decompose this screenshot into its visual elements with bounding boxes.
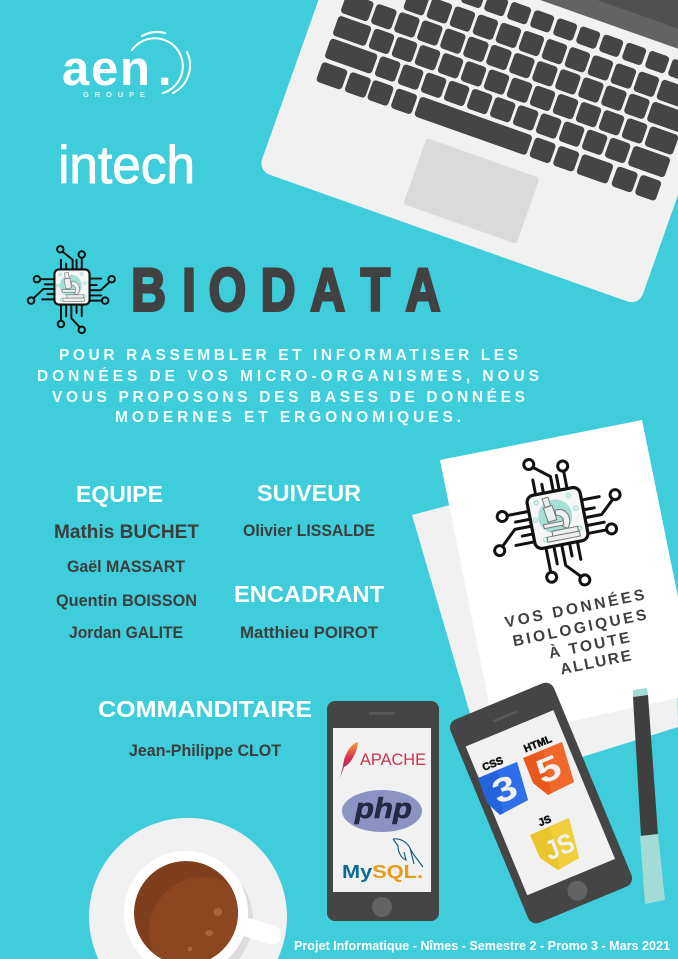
- intro text block: DONNÉES DE VOS MICRO-ORGANISMES, NOUS: [37, 368, 539, 385]
- panel: team: Mathis BUCHET: [54, 522, 199, 543]
- footer: Projet Informatique - Nîmes - Semestre 2 - Promo 3 - Mars 2021: [294, 939, 670, 953]
- icon: large chip: [479, 444, 636, 601]
- panel: team: [54, 481, 199, 642]
- panel: team: Gaël MASSART: [67, 558, 185, 576]
- logo: css3: CSS: [481, 755, 505, 774]
- intro text block: [37, 347, 539, 426]
- logo: mysql: [342, 839, 423, 882]
- logo: aen groupe: aen.: [62, 42, 172, 96]
- logo: css3: 3: [487, 768, 523, 812]
- panel: encadrant: [234, 581, 384, 642]
- heading: equipe: EQUIPE: [76, 481, 163, 507]
- paper slogan: ALLURE: [559, 647, 633, 678]
- logo: html5: HTML: [522, 733, 554, 755]
- icon: coffee cup: [89, 818, 287, 959]
- paper slogan: BIOLOGIQUES: [511, 607, 648, 650]
- panel: commanditaire: COMMANDITAIRE: [98, 696, 312, 722]
- panel: encadrant: ENCADRANT: [234, 581, 384, 607]
- logo: apache: APACHE: [360, 750, 426, 769]
- panel: team: Quentin BOISSON: [56, 592, 197, 610]
- panel: encadrant: Matthieu POIROT: [240, 624, 378, 642]
- front paper: [440, 420, 678, 738]
- logo: aen groupe: [62, 32, 190, 99]
- panel: suiveur: Olivier LISSALDE: [243, 521, 375, 540]
- intro text block: VOUS PROPOSONS DES BASES DE DONNÉES: [52, 389, 525, 406]
- logo: javascript: JS: [541, 828, 579, 866]
- logo: mysql: MySQL.: [342, 861, 423, 882]
- icon: pen: [633, 688, 665, 904]
- logo: aen groupe: GROUPE: [83, 90, 145, 99]
- logo: html5: [522, 733, 574, 795]
- intro text block: POUR RASSEMBLER ET INFORMATISER LES: [59, 347, 518, 364]
- paper slogan: À TOUTE: [547, 629, 631, 662]
- panel: suiveur: SUIVEUR: [257, 480, 361, 506]
- title: BIODATA: [131, 256, 440, 324]
- panel: commanditaire: [98, 696, 312, 760]
- panel: team: Jordan GALITE: [69, 624, 183, 642]
- phone: server stack: [327, 701, 439, 921]
- intro text block: MODERNES ET ERGONOMIQUES.: [115, 409, 461, 426]
- panel: suiveur: [243, 480, 375, 540]
- logo: css3: [478, 755, 528, 815]
- icon: small chip logo: [28, 246, 115, 333]
- logo: php: php: [354, 793, 412, 825]
- laptop: [258, 0, 678, 305]
- phone: web stack: [447, 680, 635, 926]
- panel: commanditaire: Jean-Philippe CLOT: [129, 742, 281, 760]
- logo: html5: 5: [531, 748, 567, 792]
- logo: intech: intech: [58, 136, 195, 195]
- logo: javascript: JS: [537, 813, 553, 829]
- logo: apache: [340, 742, 426, 778]
- logo: javascript: [530, 813, 579, 870]
- paper slogan: [503, 587, 657, 687]
- back paper: [412, 470, 678, 782]
- logo: php: [342, 790, 422, 832]
- paper slogan: VOS DONNÉES: [503, 587, 646, 632]
